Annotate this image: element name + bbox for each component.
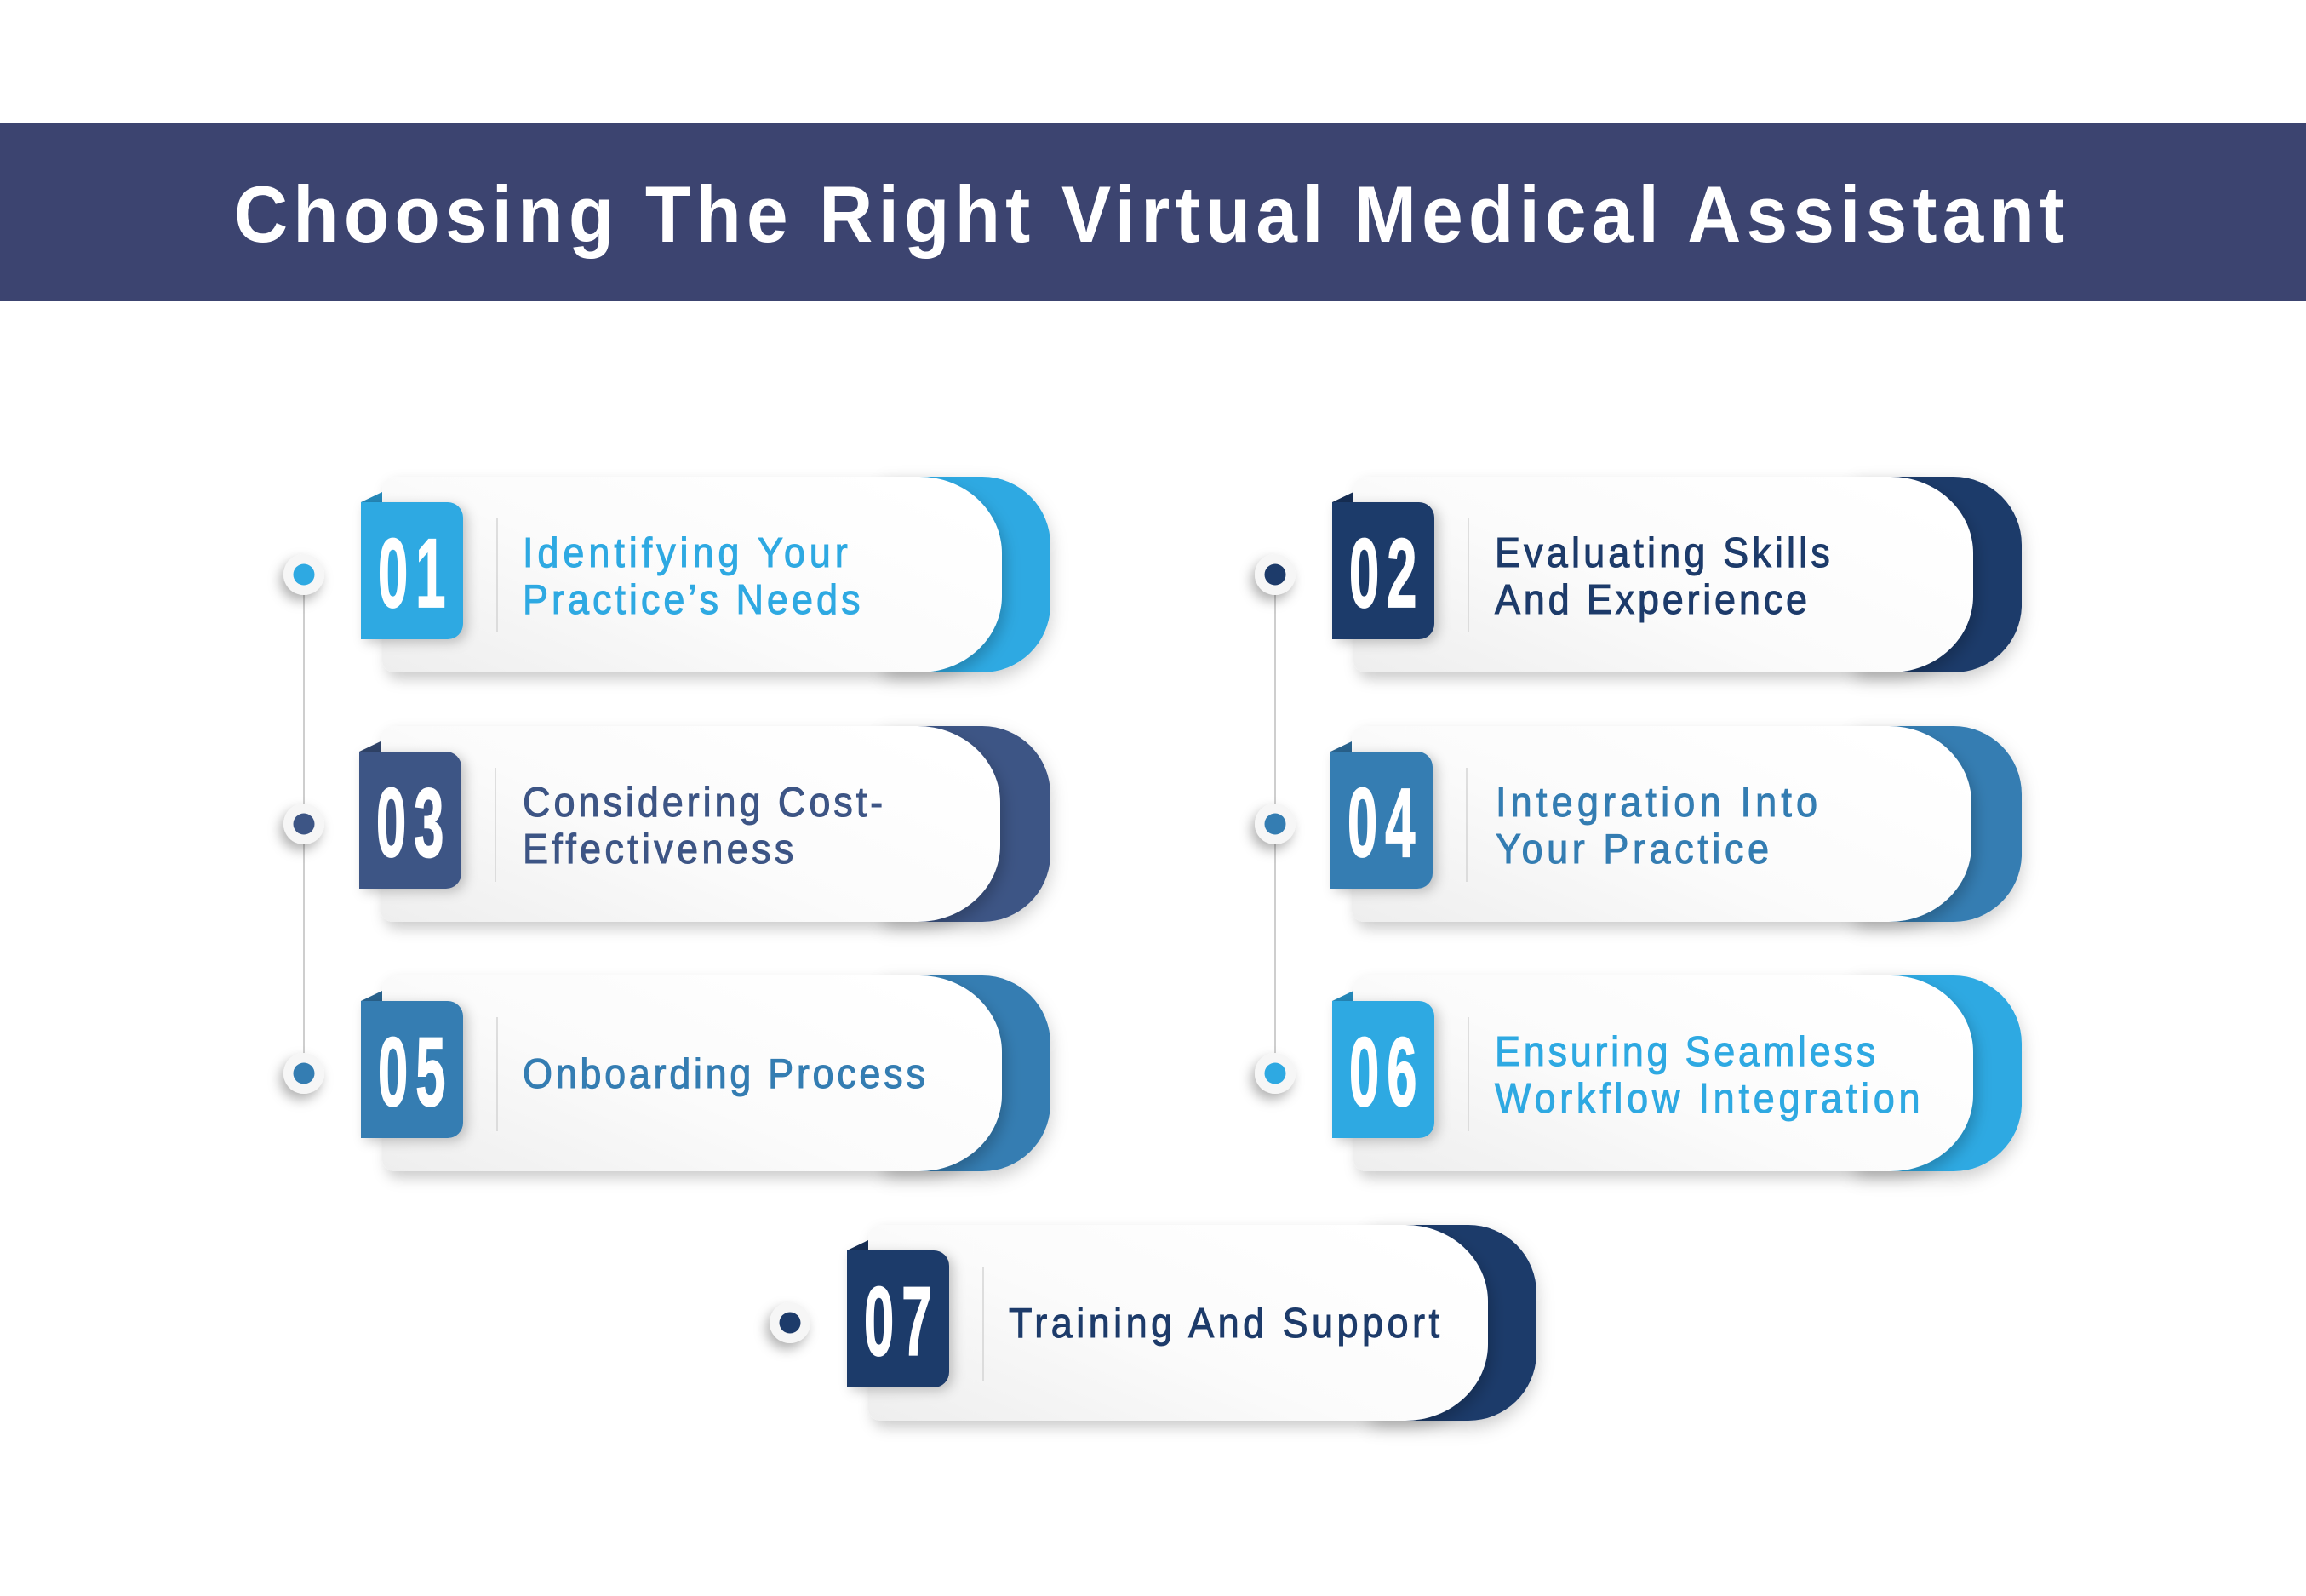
ribbon backing [1370, 1225, 1536, 1421]
label: Practice’s Needs [523, 575, 861, 622]
fold [361, 991, 382, 1001]
fold [361, 492, 382, 502]
right timeline connector [1274, 587, 1276, 1064]
label: And Experience [1495, 575, 1807, 622]
dot marker [1255, 1053, 1296, 1094]
number: 01 [378, 518, 453, 628]
dot marker [1255, 554, 1296, 595]
ribbon backing [1856, 477, 2022, 672]
label: Your Practice [1496, 825, 1769, 872]
label: Evaluating Skills [1495, 529, 1830, 575]
number tab [361, 1001, 463, 1138]
number: 07 [864, 1267, 939, 1376]
fold [847, 1240, 868, 1250]
dot marker [283, 554, 324, 595]
left timeline connector [303, 587, 305, 1064]
title: Choosing The Right Virtual Medical Assistant [234, 170, 2064, 260]
ribbon backing [1856, 726, 2022, 922]
title banner [0, 123, 2306, 301]
card body [1353, 477, 1973, 672]
card 05 [283, 975, 1050, 1171]
label: Effectiveness [523, 825, 793, 872]
card 04 [1255, 726, 2022, 922]
card body [868, 1225, 1488, 1421]
number tab [359, 752, 461, 889]
dot marker [283, 804, 324, 844]
separator [496, 518, 498, 632]
number tab [1332, 502, 1434, 639]
label: Workflow Integration [1495, 1074, 1920, 1121]
label: Ensuring Seamless [1495, 1027, 1875, 1074]
number: 06 [1349, 1017, 1424, 1127]
card 02 [1255, 477, 2022, 672]
number: 02 [1349, 518, 1424, 628]
label [1495, 1027, 1920, 1121]
card body [1352, 726, 1971, 922]
number: 03 [376, 768, 451, 878]
number tab [1332, 1001, 1434, 1138]
dot marker [1255, 804, 1296, 844]
separator [1466, 768, 1468, 882]
number: 04 [1348, 768, 1422, 878]
fold [1330, 741, 1352, 752]
number tab [361, 502, 463, 639]
separator [496, 1017, 498, 1131]
card 06 [1255, 975, 2022, 1171]
label: Integration Into [1496, 778, 1817, 825]
separator [1468, 1017, 1469, 1131]
card 07 [770, 1225, 1536, 1421]
fold [1332, 991, 1353, 1001]
label [1495, 529, 1830, 622]
dot marker [283, 1053, 324, 1094]
fold [359, 741, 381, 752]
label: Identifying Your [523, 529, 848, 575]
ribbon backing [884, 975, 1050, 1171]
card body [1353, 975, 1973, 1171]
separator [495, 768, 496, 882]
ribbon backing [884, 726, 1050, 922]
label: Training And Support [1009, 1299, 1439, 1346]
number: 05 [378, 1017, 453, 1127]
separator [982, 1267, 984, 1381]
separator [1468, 518, 1469, 632]
label [1496, 778, 1817, 872]
number tab [847, 1250, 949, 1387]
card body [382, 975, 1002, 1171]
ribbon backing [1856, 975, 2022, 1171]
number tab [1330, 752, 1433, 889]
label: Considering Cost- [523, 778, 883, 825]
dot marker [770, 1302, 810, 1343]
ribbon backing [884, 477, 1050, 672]
card body [381, 726, 1000, 922]
card 03 [283, 726, 1050, 922]
label: Onboarding Process [523, 1050, 925, 1096]
fold [1332, 492, 1353, 502]
label [523, 778, 883, 872]
label [523, 529, 861, 622]
card 01 [283, 477, 1050, 672]
card body [382, 477, 1002, 672]
